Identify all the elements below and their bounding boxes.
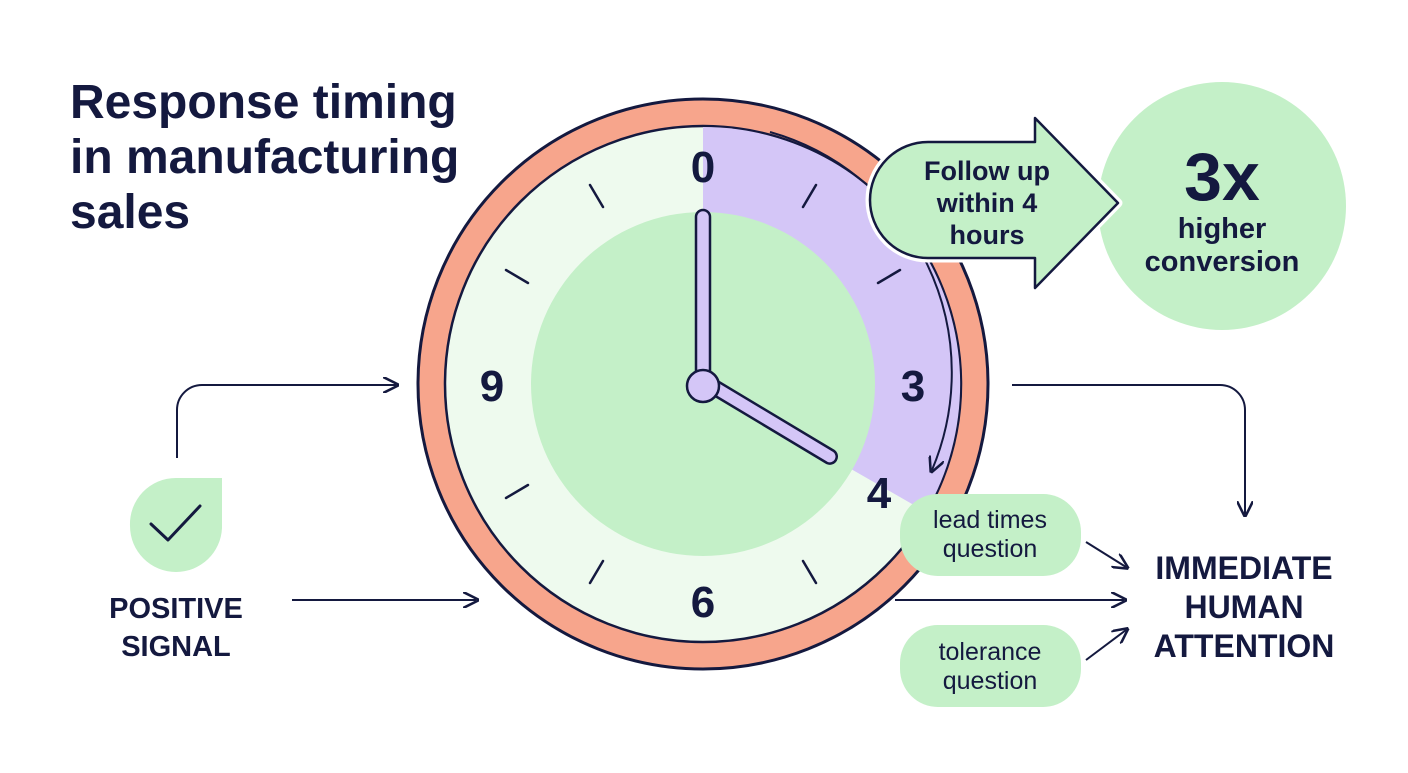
pill: lead times question [900,494,1081,576]
icon: positive check [130,478,222,572]
pill: lead times question: question [943,535,1037,563]
inner green circle [531,212,875,556]
clock numbers: 4 [867,469,892,518]
callout: follow up within 4 hours: hours [949,220,1025,250]
label: positive signal [109,593,243,663]
label: immediate human attention [1154,550,1334,664]
stat circle: 3x higher conversion: conversion [1145,246,1299,278]
pill: tolerance question [900,625,1081,707]
clock numbers: 0 [691,143,715,192]
clock numbers [480,143,925,627]
title: in manufacturing [70,131,459,184]
arrow: 3 to immediate attention [1012,385,1245,514]
purple wedge 0-4 hours [703,127,960,512]
label: immediate human attention: ATTENTION [1154,628,1334,664]
title: Response timing [70,76,457,129]
stat circle: 3x higher conversion [1098,82,1346,330]
title: sales [70,186,190,239]
arrow: clock to attention [895,599,1124,601]
label: positive signal: POSITIVE [109,593,243,625]
stat circle: 3x higher conversion: higher [1178,213,1266,245]
clock numbers: 9 [480,362,504,411]
label: immediate human attention: HUMAN [1184,589,1304,625]
clock numbers: 3 [901,362,925,411]
label: positive signal: SIGNAL [121,631,231,663]
clock [418,99,988,669]
arrow: lead times to attention [1086,542,1126,567]
clock outer ring [418,99,988,669]
clock face [445,126,961,642]
stat circle: 3x higher conversion: 3x [1184,139,1260,215]
title [70,76,459,239]
arrow: elapsed arc [770,132,952,470]
arrow: signal to clock 9 [177,385,396,458]
label: immediate human attention: IMMEDIATE [1155,550,1333,586]
pill: tolerance question: tolerance [939,638,1041,666]
callout: follow up within 4 hours [870,118,1118,288]
tick marks [506,185,900,583]
clock numbers: 6 [691,578,715,627]
arrow: signal to clock [292,599,476,601]
arrow: tolerance to attention [1086,630,1126,660]
pill: lead times question: lead times [933,506,1047,534]
pill: tolerance question: question [943,667,1037,695]
clock hands [687,210,837,464]
callout: follow up within 4 hours: within 4 [936,188,1037,218]
callout: follow up within 4 hours: Follow up [924,156,1050,186]
